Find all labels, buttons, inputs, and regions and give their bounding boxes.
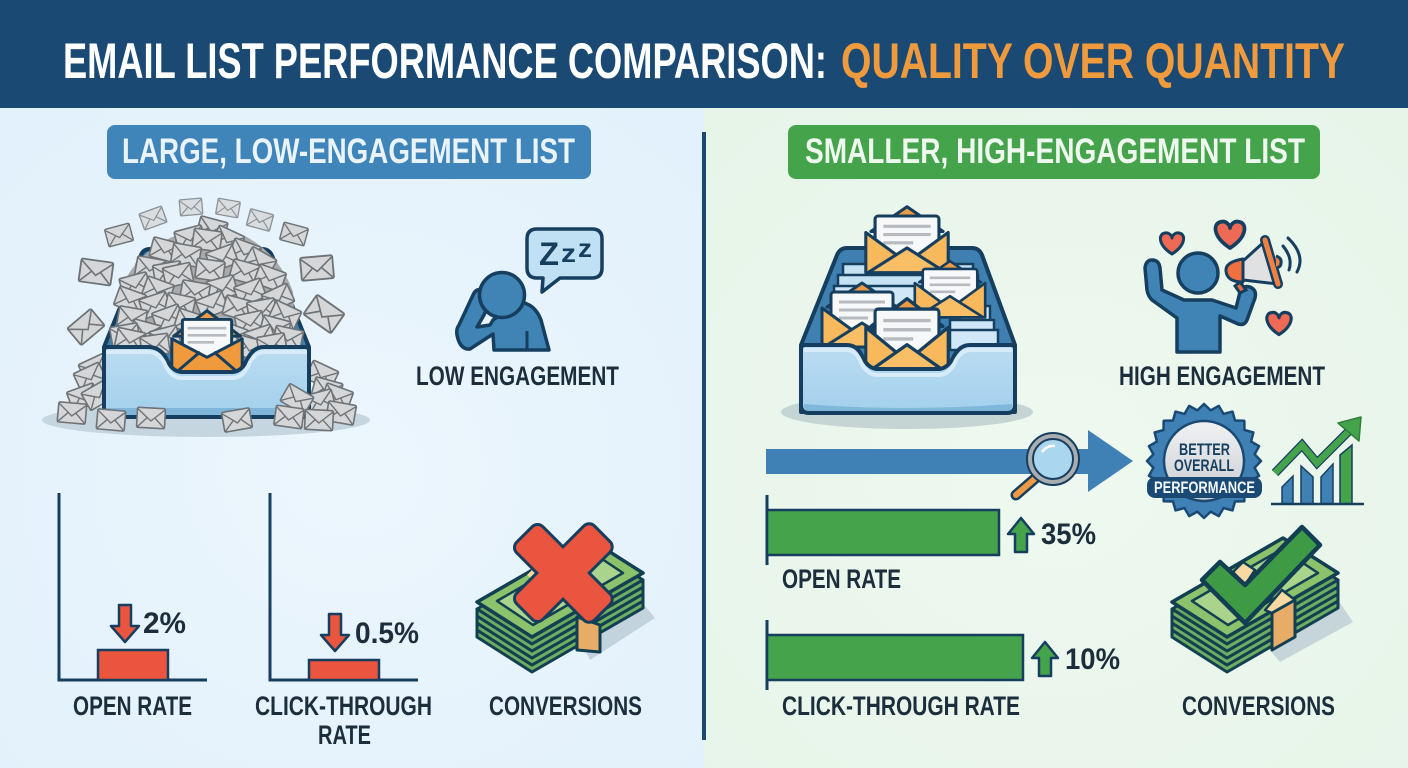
icon: growth chart [1271,417,1364,504]
chart: right open rate [767,495,1096,594]
icon: red down arrow [111,605,139,642]
icon: green up arrow [1032,642,1058,676]
icon: megaphone [1226,238,1300,293]
value: 0.5%: 0.5% [355,617,419,650]
arrow: performance arrow with magnifier [766,430,1133,495]
icon: red down arrow [321,614,349,651]
label: click-through rate [255,691,432,750]
icon: right envelope [915,261,985,317]
value: 10%: 10% [1065,643,1120,676]
chart: right click-through rate [767,620,1120,721]
panel: right background [704,108,1408,768]
icon: organized inbox tray [781,207,1033,429]
panel: left background [0,108,704,768]
icon: sleepy person [457,229,602,350]
icon: magnifying glass [1016,433,1079,495]
header banner [0,0,1408,108]
icon: green up arrow [1008,518,1034,552]
label: open rate: OPEN RATE [782,564,901,594]
label: click-through rate: RATE [318,720,371,750]
chart: left click-through rate [255,493,432,750]
icon: zzz speech bubble [527,229,602,292]
label: open rate: OPEN RATE [73,691,192,721]
label: click-through rate: CLICK-THROUGH [255,691,432,721]
icon: better overall performance badge [1147,404,1262,518]
icon: money stack with green check [1172,527,1353,672]
icon: hearts [1160,222,1291,335]
icon: zzz speech bubble: z [578,233,592,263]
icon: back envelope [866,207,948,273]
panel heading: smaller high-engagement list [788,125,1320,179]
label: low engagement: LOW ENGAGEMENT [416,361,619,391]
icon: orange open envelope [172,311,242,373]
icon: front envelope [866,299,948,372]
value: 35%: 35% [1041,518,1096,551]
divider [702,132,706,740]
chart: left open rate [59,493,207,721]
icon: better overall performance badge: OVERALL [1174,456,1234,475]
panel heading: large low-engagement list: LARGE, LOW-ENGAGEMENT LIST [122,132,575,171]
icon: zzz speech bubble: Z [539,236,559,272]
label: left conversions: CONVERSIONS [489,691,642,721]
label: right conversions: CONVERSIONS [1182,691,1335,721]
label: click-through rate: CLICK-THROUGH RATE [782,691,1020,721]
header banner: EMAIL LIST PERFORMANCE COMPARISON: [63,33,827,89]
icon: better overall performance badge: BETTER [1179,440,1230,459]
icon: better overall performance badge: PERFORMANCE [1154,479,1255,497]
icon: left envelope [822,283,902,347]
icon: zzz speech bubble: z [561,238,576,268]
icon: overflowing inbox tray [42,198,370,437]
icon: money stack with red x [477,523,655,672]
panel heading: large low-engagement list [107,125,591,179]
icon: person with megaphone and hearts [1145,222,1300,352]
label: high engagement: HIGH ENGAGEMENT [1119,361,1325,391]
value: 2%: 2% [143,607,186,640]
